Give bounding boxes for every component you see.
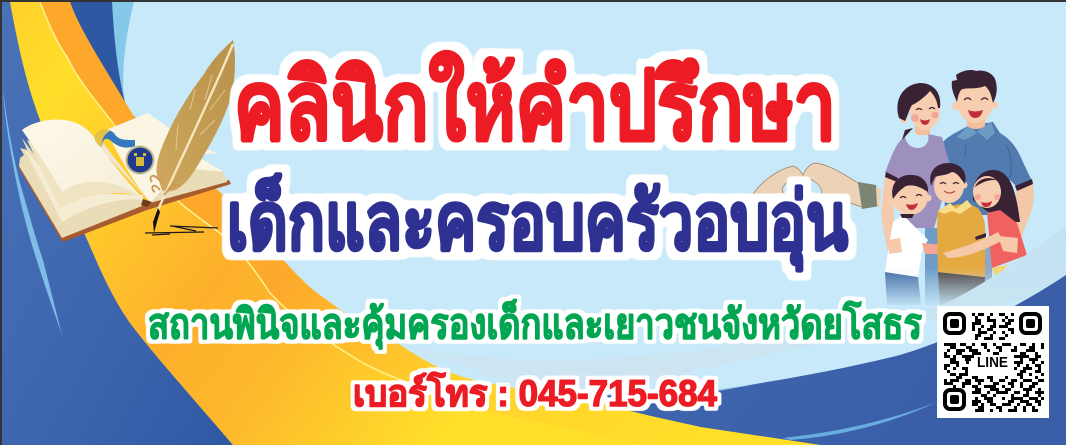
- icon: heart hands: [750, 163, 881, 210]
- QR finder bottom left: [945, 390, 964, 409]
- seal emblem: [95, 129, 154, 174]
- background: frame top: [0, 0, 1066, 2]
- title line 2: เด็กและครอบครัวอบอุ่น: [227, 173, 848, 272]
- illustration: family: [880, 70, 1034, 308]
- phone number: เบอร์โทร : 045-715-684: [353, 371, 717, 414]
- QR finder top right: [1021, 314, 1040, 333]
- background: thin light line over blue: [625, 382, 767, 399]
- background: lower right blue swoosh: [560, 275, 1066, 445]
- QR label: LINE: [977, 354, 1008, 371]
- boy left: [885, 175, 956, 305]
- mother: [882, 83, 950, 305]
- QR finder top left: [945, 314, 964, 333]
- background: lower-left light streak: [3, 90, 62, 335]
- ink scribble: [145, 226, 218, 235]
- background: orange stripe: [40, 2, 820, 445]
- girl right: [943, 170, 1027, 278]
- background: left blue band: [0, 0, 240, 445]
- boy centre: [930, 163, 992, 305]
- fade at base: [880, 268, 1000, 308]
- title line 1: คลินิกให้คำปรึกษา: [234, 51, 836, 160]
- background: yellow ribbon: [10, 2, 820, 445]
- father: [943, 70, 1034, 252]
- background: pale highlight line: [40, 2, 463, 403]
- icon: open book: [17, 113, 231, 242]
- icon: quill feather: [145, 40, 235, 235]
- background: dark blue top ribbon: [70, 2, 129, 110]
- mother's hand: [888, 238, 902, 254]
- background: frame left: [0, 0, 2, 445]
- subtitle: organisation name: สถานพินิจและคุ้มครองเด็กและเยาวชนจังหวัดยโสธร: [148, 299, 922, 350]
- background: light blue ribbon: [112, 2, 134, 100]
- QR code: [937, 306, 1049, 418]
- background: pale swoosh band: [395, 227, 1066, 400]
- background: streak in blue: [783, 402, 937, 440]
- QR modules: [944, 313, 1044, 412]
